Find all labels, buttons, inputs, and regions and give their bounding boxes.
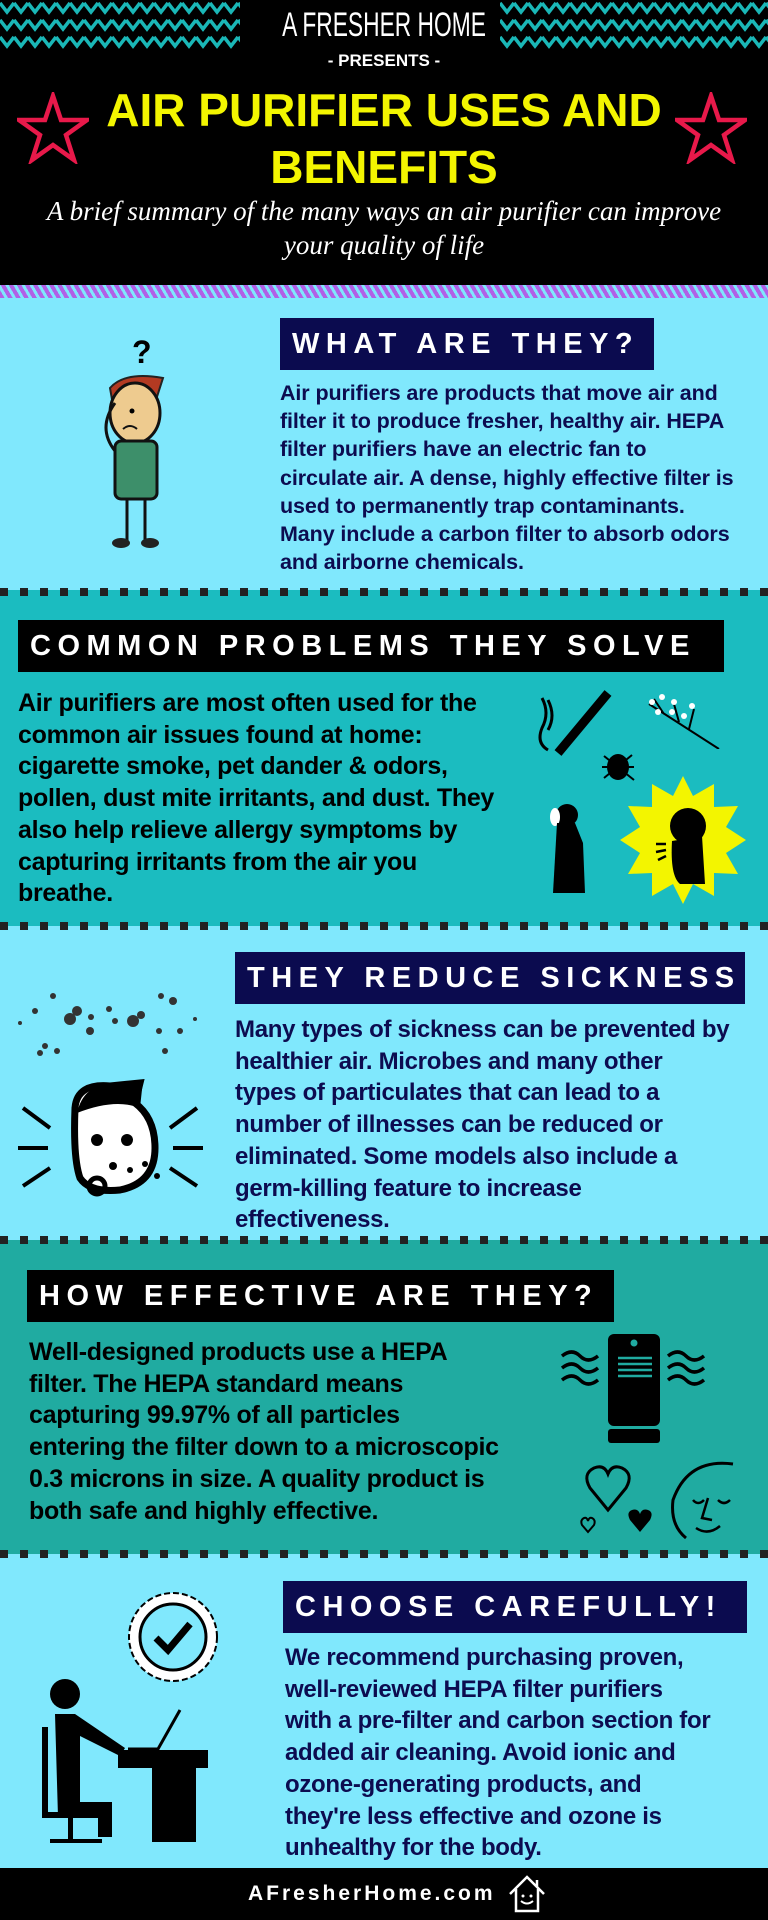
text block: and airborne chemicals. (280, 550, 524, 574)
text block (285, 1644, 710, 1861)
text block: circulate air. A dense, highly effective filter is (280, 466, 733, 490)
text block: common air issues found at home: (18, 721, 422, 749)
text block: Many types of sickness can be prevented by (235, 1016, 729, 1043)
icon: person at desk (42, 1679, 208, 1843)
text block: entering the filter down to a microscopic (29, 1433, 499, 1461)
heading: HOW EFFECTIVE ARE THEY? (39, 1280, 598, 1312)
icon: sneezing burst (620, 776, 746, 904)
panel: common problems (0, 590, 768, 926)
zigzag pattern right (500, 2, 768, 49)
text block: filter purifiers have an electric fan to (280, 437, 646, 461)
text block: Well-designed products use a HEPA (29, 1338, 447, 1366)
panel: choose carefully (0, 1554, 768, 1868)
heading: THEY REDUCE SICKNESS (247, 962, 741, 994)
presents: - PRESENTS - (328, 51, 440, 70)
text block: with a pre-filter and carbon section for (285, 1707, 710, 1734)
header (0, 0, 768, 288)
text block: number of illnesses can be reduced or (235, 1111, 663, 1138)
icon: hearts and calm face (580, 1462, 734, 1540)
icon: star right (675, 92, 747, 164)
heading (27, 1270, 614, 1322)
text block: Air purifiers are products that move air and (280, 381, 718, 405)
heading: COMMON PROBLEMS THEY SOLVE (30, 630, 696, 662)
text block: unhealthy for the body. (285, 1834, 542, 1861)
heading (18, 620, 724, 672)
icon: pollen flower (648, 694, 720, 749)
text block: healthier air. Microbes and many other (235, 1048, 662, 1075)
icon: dust mite (602, 754, 635, 781)
icon: house (509, 1875, 545, 1912)
icon: sick face (18, 1079, 203, 1196)
subtitle (45, 196, 721, 260)
text block (18, 689, 494, 907)
heading (280, 318, 654, 370)
brand name: A FRESHER HOME (282, 6, 486, 44)
icon: germs (18, 993, 197, 1056)
text block: filter. The HEPA standard means (29, 1370, 403, 1398)
heading (283, 1581, 747, 1633)
icon: air purifier (561, 1334, 705, 1443)
icon: badge check (128, 1592, 218, 1682)
text block: types of particulates that can lead to a (235, 1079, 659, 1106)
heading (235, 952, 745, 1004)
text block: added air cleaning. Avoid ionic and (285, 1739, 675, 1766)
text block: also help relieve allergy symptoms by (18, 816, 457, 844)
text block: eliminated. Some models also include a (235, 1143, 677, 1170)
icon: confused man: ? (132, 334, 152, 370)
text block: cigarette smoke, pet dander & odors, (18, 752, 448, 780)
heading: WHAT ARE THEY? (292, 328, 639, 360)
text block: well-reviewed HEPA filter purifiers (285, 1676, 663, 1703)
zigzag pattern left (0, 2, 240, 49)
text block (280, 381, 733, 574)
text block: both safe and highly effective. (29, 1497, 378, 1525)
icon: confused man (104, 334, 164, 548)
panel: reduce sickness (0, 926, 768, 1240)
text block: filter it to produce fresher, healthy air. HEPA (280, 409, 724, 433)
text block: 0.3 microns in size. A quality product is (29, 1465, 484, 1493)
title: BENEFITS (270, 141, 498, 193)
text block: Air purifiers are most often used for the (18, 689, 477, 717)
subtitle: your quality of life (284, 230, 484, 260)
text block: germ-killing feature to increase (235, 1175, 582, 1202)
text block: effectiveness. (235, 1206, 390, 1233)
text block: capturing 99.97% of all particles (29, 1401, 400, 1429)
subtitle: A brief summary of the many ways an air purifier can improve (47, 196, 721, 226)
text block: used to permanently trap contaminants. (280, 494, 685, 518)
text block: We recommend purchasing proven, (285, 1644, 683, 1671)
icon: dog (550, 804, 585, 893)
title: AIR PURIFIER USES AND (106, 84, 662, 136)
text block: breathe. (18, 879, 113, 907)
text block: ozone-generating products, and (285, 1771, 641, 1798)
text block: they're less effective and ozone is (285, 1803, 662, 1830)
title (106, 84, 662, 193)
text block: Many include a carbon filter to absorb odors (280, 522, 730, 546)
text block: pollen, dust mite irritants, and dust. They (18, 784, 494, 812)
footer url: AFresherHome.com (248, 1882, 496, 1905)
icon: star left (17, 92, 89, 164)
panel: what are they (0, 298, 768, 590)
footer (0, 1868, 768, 1920)
text block (235, 1016, 730, 1233)
panel: how effective (0, 1240, 768, 1554)
icon: cigarette (538, 690, 612, 756)
text block: capturing irritants from the air you (18, 848, 417, 876)
text block (29, 1338, 499, 1525)
heading: CHOOSE CAREFULLY! (295, 1591, 722, 1623)
